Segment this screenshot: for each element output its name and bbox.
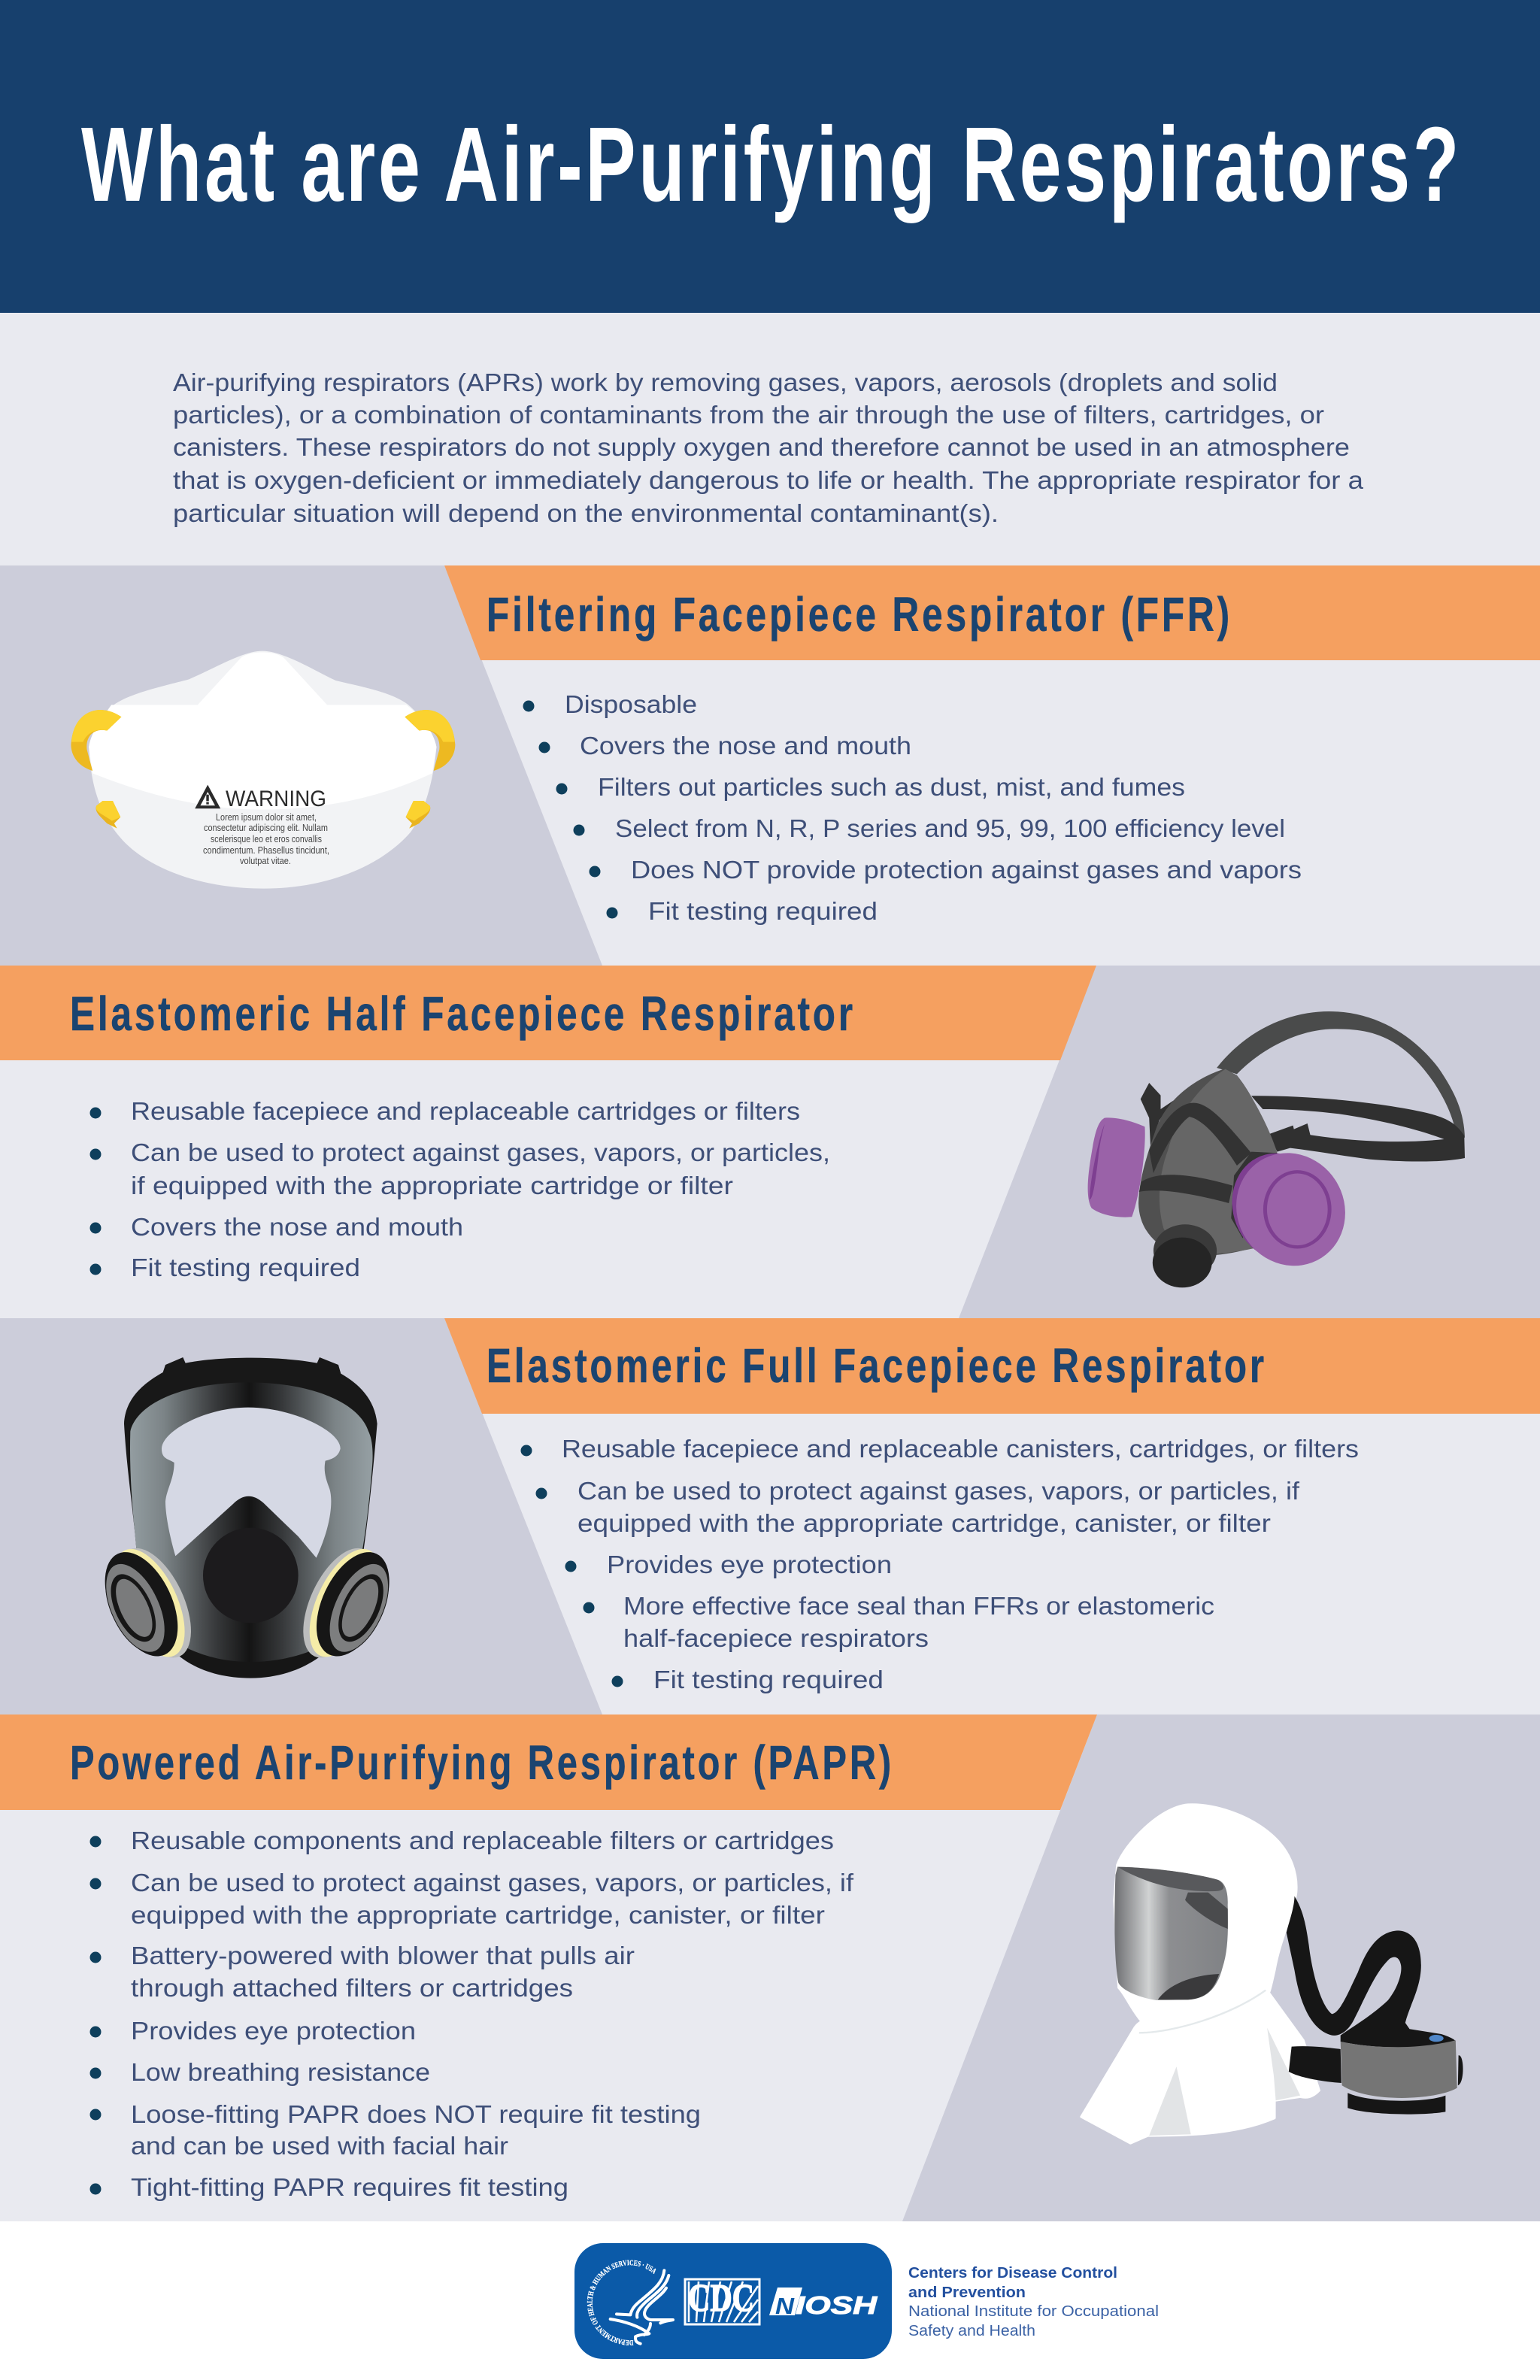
bullet: no gas protection: Does NOT provide protection against gases and vapors: [631, 856, 1302, 884]
bullet: protection against gases: equipped with the appropriate cartridge, canister, or filter: [131, 1901, 825, 1929]
bullet: eye protection: Provides eye protection: [131, 2017, 416, 2045]
icon: powered air-purifying respirator hood and blower: [1081, 1805, 1463, 2143]
bullet: battery-powered: [90, 1942, 635, 2002]
bullet list: FFR: [523, 690, 1302, 925]
bullet: low breathing resistance: Low breathing resistance: [131, 2058, 430, 2086]
intro paragraph: particular situation will depend on the environmental contaminant(s).: [173, 499, 999, 527]
bullet: eye protection: Provides eye protection: [607, 1551, 892, 1578]
header panel: [0, 0, 1540, 313]
icon: NIOSH logo: IOSH: [796, 2291, 878, 2319]
bullet: fit testing: Fit testing required: [131, 1254, 360, 1281]
logo panel: [574, 2243, 892, 2359]
bullet: face seal: [584, 1592, 1214, 1652]
mask label fine print: consectetur adipiscing elit. Nullam: [204, 822, 328, 833]
icon: half facepiece respirator: [1088, 1011, 1465, 1287]
intro paragraph: canisters. These respirators do not supply oxygen and therefore cannot be used in an atmosphere: [173, 433, 1350, 461]
bullet: reusable facepiece: Reusable facepiece and replaceable cartridges or filters: [131, 1097, 800, 1125]
agency name text: [908, 2265, 1159, 2339]
panel: elastomeric half facepiece respirator: [0, 966, 1540, 1318]
icon: NIOSH logo: [769, 2288, 878, 2319]
heading: full facepiece: Elastomeric Full Facepiece Respirator: [487, 1339, 1267, 1393]
agency name text: National Institute for Occupational: [908, 2303, 1159, 2320]
bullet: covers nose and mouth: Covers the nose and mouth: [580, 732, 911, 759]
intro panel: [0, 313, 1540, 565]
bullet: series and efficiency: Select from N, R, P series and 95, 99, 100 efficiency level: [615, 814, 1285, 842]
footer: [574, 2243, 1159, 2359]
panel: elastomeric full facepiece respirator: [0, 1318, 1540, 1715]
bullet: protection against gases: [90, 1138, 830, 1199]
bullet: loose-fitting: and can be used with facial hair: [131, 2132, 508, 2160]
panel: filtering facepiece respirator: [0, 565, 1540, 966]
bullet: battery-powered: Battery-powered with blower that pulls air: [131, 1942, 635, 1969]
bullet: filters particles: Filters out particles such as dust, mist, and fumes: [598, 773, 1185, 801]
intro paragraph: that is oxygen-deficient or immediately dangerous to life or health. The appropriate respirator for a: [173, 466, 1364, 494]
mask label fine print: [203, 811, 329, 866]
mask label fine print: Lorem ipsum dolor sit amet,: [216, 811, 317, 823]
bullet: protection against gases: [90, 1869, 854, 1929]
bullet: protection against gases: Can be used to protect against gases, vapors, or particles, if: [578, 1477, 1300, 1505]
bullet: protection against gases: Can be used to protect against gases, vapors, or particles,: [131, 1138, 830, 1166]
intro paragraph: particles), or a combination of contaminants from the air through the use of filters, cartridges, or: [173, 401, 1324, 429]
bullet: protection against gases: [535, 1477, 1300, 1537]
bullet: loose-fitting: Loose-fitting PAPR does NOT require fit testing: [131, 2100, 701, 2128]
bullet list: PAPR: [90, 1827, 854, 2201]
bullet: protection against gases: Can be used to protect against gases, vapors, or particles, if: [131, 1869, 854, 1896]
bullet list: half facepiece: [90, 1097, 830, 1281]
heading: half facepiece: Elastomeric Half Facepiece Respirator: [70, 987, 856, 1041]
mask label fine print: scelerisque leo et eros convallis: [211, 833, 322, 844]
bullet list: full facepiece: [520, 1435, 1359, 1693]
bullet: protection against gases: equipped with the appropriate cartridge, canister, or filter: [578, 1509, 1271, 1537]
bullet: fit testing: Fit testing required: [653, 1666, 884, 1693]
bullet: tight-fitting: Tight-fitting PAPR requires fit testing: [131, 2173, 568, 2201]
bullet: fit testing: Fit testing required: [648, 897, 878, 925]
icon: disposable FFR mask: [71, 651, 455, 889]
agency name text: Safety and Health: [908, 2323, 1035, 2339]
mask label fine print: condimentum. Phasellus tincidunt,: [203, 844, 329, 856]
bullet: battery-powered: through attached filters or cartridges: [131, 1974, 573, 2002]
icon: CDC logo: CDC: [688, 2277, 754, 2320]
mask warning label: WARNING: [226, 787, 326, 811]
bullet: reusable facepiece: Reusable facepiece and replaceable canisters, cartridges, or filters: [562, 1435, 1359, 1463]
bullet: covers nose and mouth: Covers the nose and mouth: [131, 1213, 463, 1241]
icon: full facepiece respirator: [90, 1357, 404, 1678]
icon: NIOSH logo: N: [775, 2293, 795, 2319]
intro paragraph: Air-purifying respirators (APRs) work by removing gases, vapors, aerosols (droplets and solid: [173, 368, 1278, 396]
agency name text: Centers for Disease Control: [908, 2265, 1117, 2281]
intro paragraph: [173, 368, 1364, 527]
agency name text: and Prevention: [908, 2284, 1026, 2301]
icon: HHS eagle seal: DEPARTMENT OF HEALTH & HUMAN SERVICES · USA: [587, 2260, 656, 2345]
bullet: protection against gases: if equipped with the appropriate cartridge or filter: [131, 1172, 733, 1199]
bullet: reusable components: Reusable components and replaceable filters or cartridges: [131, 1827, 834, 1854]
bullet: disposable: Disposable: [565, 690, 697, 718]
bullet: face seal: half-facepiece respirators: [623, 1624, 929, 1652]
heading: FFR: Filtering Facepiece Respirator (FFR): [487, 587, 1232, 641]
panel: powered air-purifying respirator: [0, 1715, 1540, 2221]
bullet: face seal: More effective face seal than FFRs or elastomeric: [623, 1592, 1214, 1620]
bullet: loose-fitting: [90, 2100, 701, 2160]
heading: PAPR: Powered Air-Purifying Respirator (PAPR): [70, 1736, 894, 1790]
mask label fine print: volutpat vitae.: [240, 855, 291, 866]
